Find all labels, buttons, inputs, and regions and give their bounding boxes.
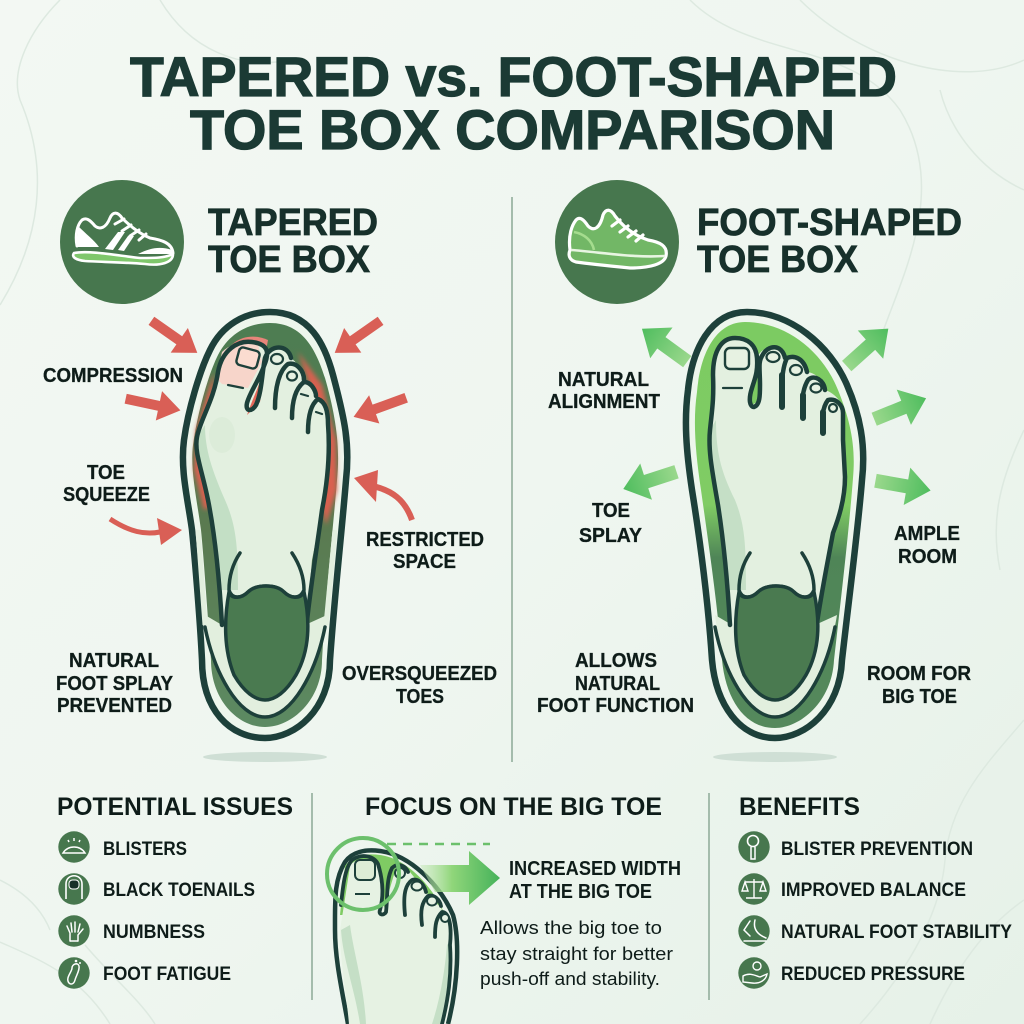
icon: foot fatigue <box>58 957 90 989</box>
foot-shaped foot diagram <box>686 312 863 762</box>
heading: foot-shaped toe box <box>697 202 962 281</box>
heading: benefits: BENEFITS <box>739 793 860 821</box>
item: improved balance: IMPROVED BALANCE <box>781 879 966 901</box>
arrow: toe squeeze <box>110 518 182 545</box>
labels: tapered: SQUEEZE <box>63 484 150 506</box>
panel: benefits <box>738 793 1012 989</box>
labels: foot-shaped: ALLOWS <box>575 650 657 672</box>
title: TAPERED vs. FOOT-SHAPED <box>130 45 897 108</box>
labels: foot-shaped: BIG TOE <box>882 686 957 708</box>
panel: focus on the big toe <box>327 793 681 1024</box>
red compression arrows <box>123 309 411 431</box>
labels: tapered <box>43 365 497 717</box>
icon: reduced pressure <box>738 957 770 989</box>
green splay arrows <box>617 313 934 509</box>
labels: foot-shaped <box>537 369 972 717</box>
item: blisters: BLISTERS <box>103 838 187 860</box>
tapered foot diagram <box>183 312 347 762</box>
icon: blisters <box>58 831 90 863</box>
labels: tapered: FOOT SPLAY <box>56 673 174 695</box>
icon: numbness <box>58 915 90 947</box>
labels: foot-shaped: NATURAL <box>575 673 660 695</box>
description text: Allows the big toe to <box>480 917 662 938</box>
item: foot fatigue: FOOT FATIGUE <box>103 963 231 985</box>
labels: tapered: TOES <box>396 686 444 708</box>
labels: foot-shaped: FOOT FUNCTION <box>537 695 694 717</box>
icon: foot-shaped shoe badge <box>555 180 679 304</box>
title <box>130 45 897 161</box>
heading: tapered toe box <box>208 202 378 281</box>
labels: tapered: NATURAL <box>69 650 159 672</box>
callout: increased width <box>509 858 681 903</box>
callout: increased width: INCREASED WIDTH <box>509 858 681 880</box>
labels: tapered: TOE <box>87 462 125 484</box>
icon: black toenails <box>58 873 90 905</box>
title: TOE BOX COMPARISON <box>190 98 835 161</box>
labels: tapered: OVERSQUEEZED <box>342 663 497 685</box>
labels: tapered: RESTRICTED <box>366 529 484 551</box>
labels: foot-shaped: TOE <box>592 500 630 522</box>
heading: potential issues: POTENTIAL ISSUES <box>57 793 293 821</box>
arrow: restricted space <box>354 470 412 520</box>
icon: improved balance <box>738 873 770 905</box>
heading: foot-shaped toe box: TOE BOX <box>697 239 859 281</box>
description text <box>480 917 673 989</box>
heading: focus on the big toe: FOCUS ON THE BIG TOE <box>365 793 662 821</box>
heading: foot-shaped toe box: FOOT-SHAPED <box>697 202 962 244</box>
icon: natural foot stability <box>738 915 770 947</box>
item: numbness: NUMBNESS <box>103 921 205 943</box>
labels: tapered: SPACE <box>393 551 456 573</box>
item: blister prevention: BLISTER PREVENTION <box>781 838 973 860</box>
labels: tapered: PREVENTED <box>57 695 172 717</box>
description text: push-off and stability. <box>480 968 660 989</box>
arrow: increased width <box>420 851 500 905</box>
labels: foot-shaped: SPLAY <box>579 525 643 547</box>
labels: tapered: COMPRESSION <box>43 365 183 387</box>
description text: stay straight for better <box>480 943 673 964</box>
diagram: big toe close-up <box>327 838 457 1024</box>
panel: potential issues <box>57 793 293 989</box>
labels: foot-shaped: AMPLE <box>894 523 960 545</box>
heading: tapered toe box: TAPERED <box>208 202 378 244</box>
item: reduced pressure: REDUCED PRESSURE <box>781 963 965 985</box>
labels: foot-shaped: NATURAL <box>558 369 649 391</box>
labels: foot-shaped: ALIGNMENT <box>548 391 660 413</box>
heading: tapered toe box: TOE BOX <box>208 239 371 281</box>
icon: tapered shoe badge <box>60 180 184 304</box>
callout: increased width: AT THE BIG TOE <box>509 881 652 903</box>
labels: foot-shaped: ROOM <box>898 546 957 568</box>
labels: foot-shaped: ROOM FOR <box>867 663 972 685</box>
item: black toenails: BLACK TOENAILS <box>103 879 255 901</box>
dashed width marker <box>387 843 490 845</box>
icon: blister prevention <box>738 831 770 863</box>
